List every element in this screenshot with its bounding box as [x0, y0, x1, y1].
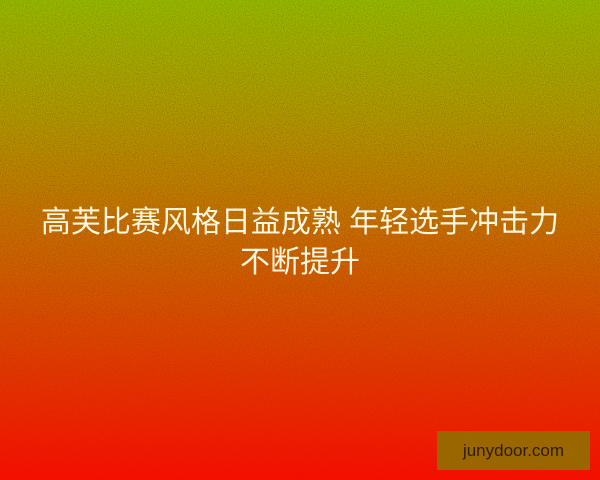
title: 高芙比赛风格日益成熟 年轻选手冲击力 [41, 206, 559, 239]
title: 不断提升 [240, 246, 360, 279]
watermark badge: junydoor.com [463, 441, 564, 460]
title [41, 206, 559, 279]
watermark badge [437, 431, 590, 470]
